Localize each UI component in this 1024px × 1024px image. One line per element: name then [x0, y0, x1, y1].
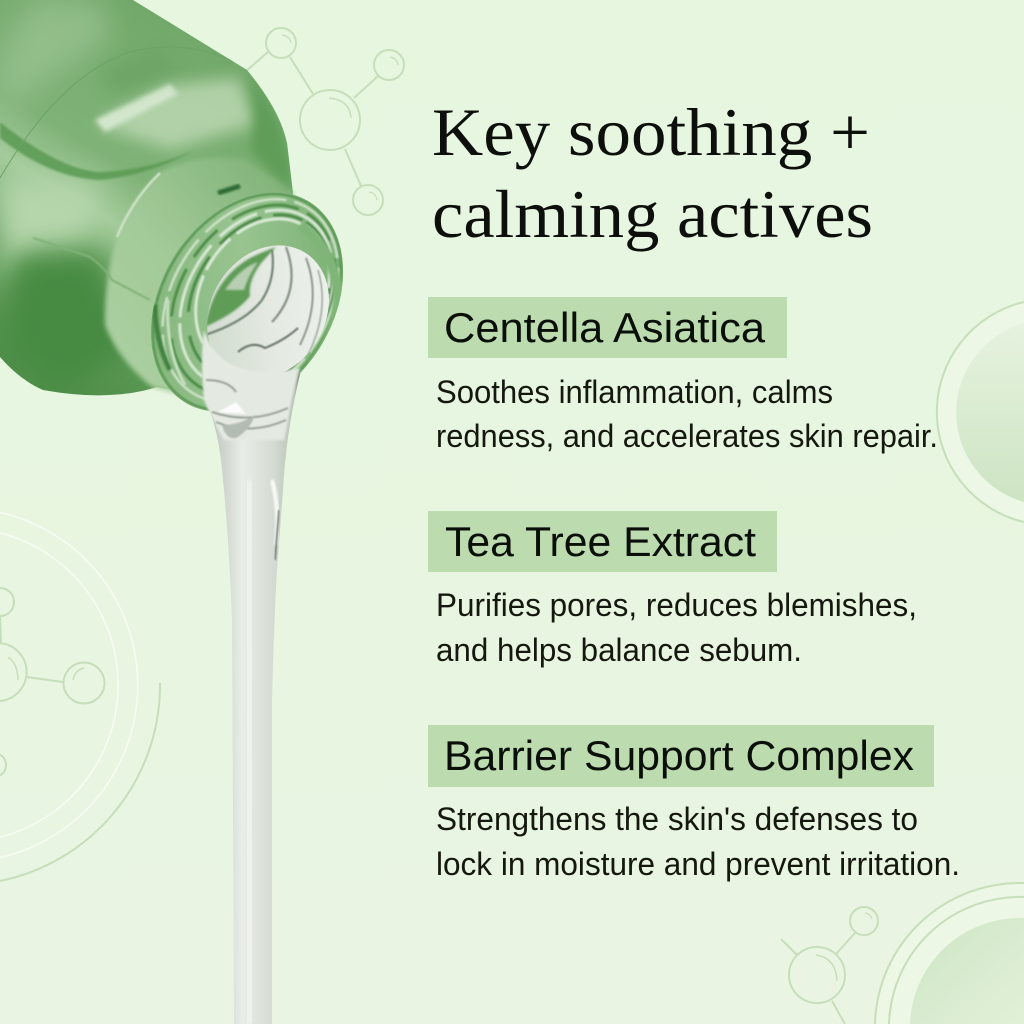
- title: Key soothing +: [432, 94, 870, 170]
- panel: Tea Tree Extract: [428, 511, 917, 668]
- icon: molecule bottom right: [781, 907, 878, 1024]
- decorative circle: bottom right: [875, 883, 1024, 1024]
- label: Barrier Support Complex: [428, 725, 934, 787]
- bottle mouth: [207, 245, 329, 374]
- description: Tea Tree Extract: Purifies pores, reduces blemishes,: [436, 587, 917, 623]
- panel: Barrier Support Complex: [428, 725, 960, 882]
- icon: molecule left: [0, 588, 104, 775]
- description: Centella Asiatica: redness, and accelerates skin repair.: [436, 418, 938, 454]
- title: [432, 94, 873, 252]
- description: Centella Asiatica: Soothes inflammation, calms: [436, 374, 833, 410]
- bottle threads: [151, 192, 344, 412]
- description: Centella Asiatica: [436, 374, 938, 454]
- label: Barrier Support Complex: Barrier Support Complex: [444, 732, 914, 779]
- decorative circle: right: [937, 302, 1024, 522]
- description: Barrier Support Complex: Strengthens the skin's defenses to: [436, 801, 918, 837]
- panel: Centella Asiatica: [428, 297, 938, 454]
- description: Barrier Support Complex: [436, 801, 960, 882]
- decorative rings: left: [0, 512, 160, 881]
- bottle: [0, 0, 344, 440]
- bottle shading and highlights: [0, 0, 293, 395]
- description: Tea Tree Extract: and helps balance sebum.: [436, 632, 802, 668]
- label: Tea Tree Extract: Tea Tree Extract: [445, 518, 756, 565]
- description: Tea Tree Extract: [436, 587, 917, 668]
- label: Centella Asiatica: Centella Asiatica: [444, 304, 766, 351]
- description: Barrier Support Complex: lock in moisture and prevent irritation.: [436, 846, 960, 882]
- label: Centella Asiatica: [428, 297, 787, 358]
- title: calming actives: [432, 176, 873, 252]
- bottle body: [0, 0, 293, 400]
- icon: molecule top: [245, 28, 404, 215]
- inner green crescent: [205, 247, 276, 330]
- label: Tea Tree Extract: [428, 511, 777, 572]
- liquid at lip: [202, 330, 300, 440]
- bottle neck: [105, 158, 293, 400]
- liquid stream: [210, 366, 302, 1024]
